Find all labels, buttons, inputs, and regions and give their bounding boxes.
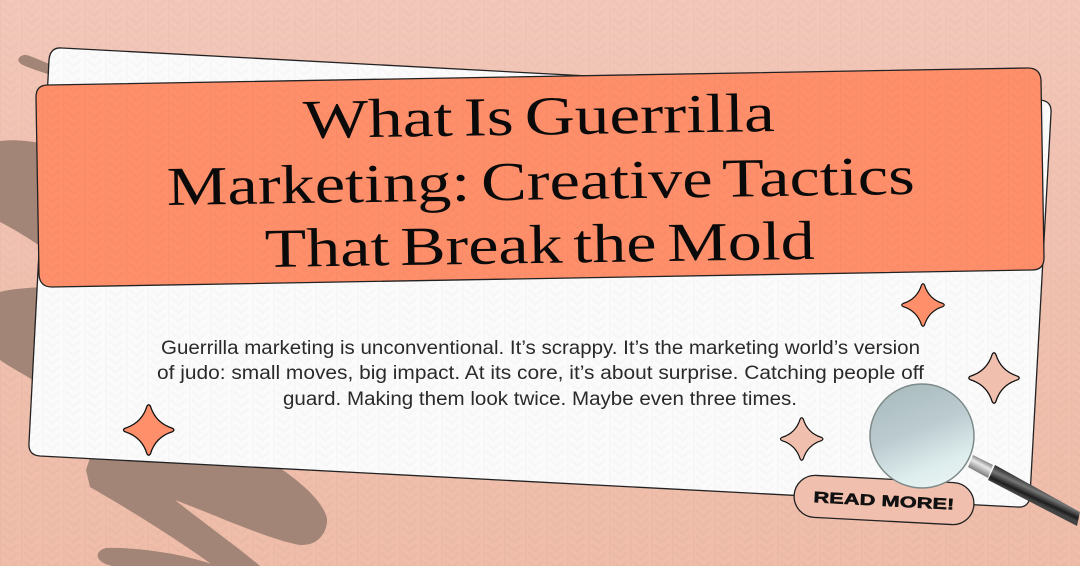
- panel: orange title banner: [36, 68, 1044, 287]
- icon: pink star right: [969, 353, 1019, 403]
- button: read more: [793, 474, 975, 526]
- icon: magnifying glass: [870, 384, 1080, 526]
- title: That Break the Mold: [264, 210, 815, 279]
- button: read more: READ MORE!: [813, 489, 955, 514]
- decorative shadow shapes: [0, 55, 327, 566]
- title: What Is Guerrilla: [302, 82, 775, 150]
- title: Marketing: Creative Tactics: [166, 145, 915, 217]
- icon: orange star top: [902, 284, 944, 326]
- panel: white card: [29, 48, 1051, 507]
- title: [166, 82, 915, 279]
- icon: pink star small: [780, 418, 823, 460]
- body text: [157, 338, 925, 410]
- body text: of judo: small moves, big impact. At its core, it’s about surprise. Catching people off: [157, 363, 925, 384]
- body text: guard. Making them look twice. Maybe even three times.: [283, 389, 797, 410]
- icon: orange star left: [124, 405, 174, 455]
- body text: Guerrilla marketing is unconventional. It’s scrappy. It’s the marketing world’s version: [161, 338, 920, 359]
